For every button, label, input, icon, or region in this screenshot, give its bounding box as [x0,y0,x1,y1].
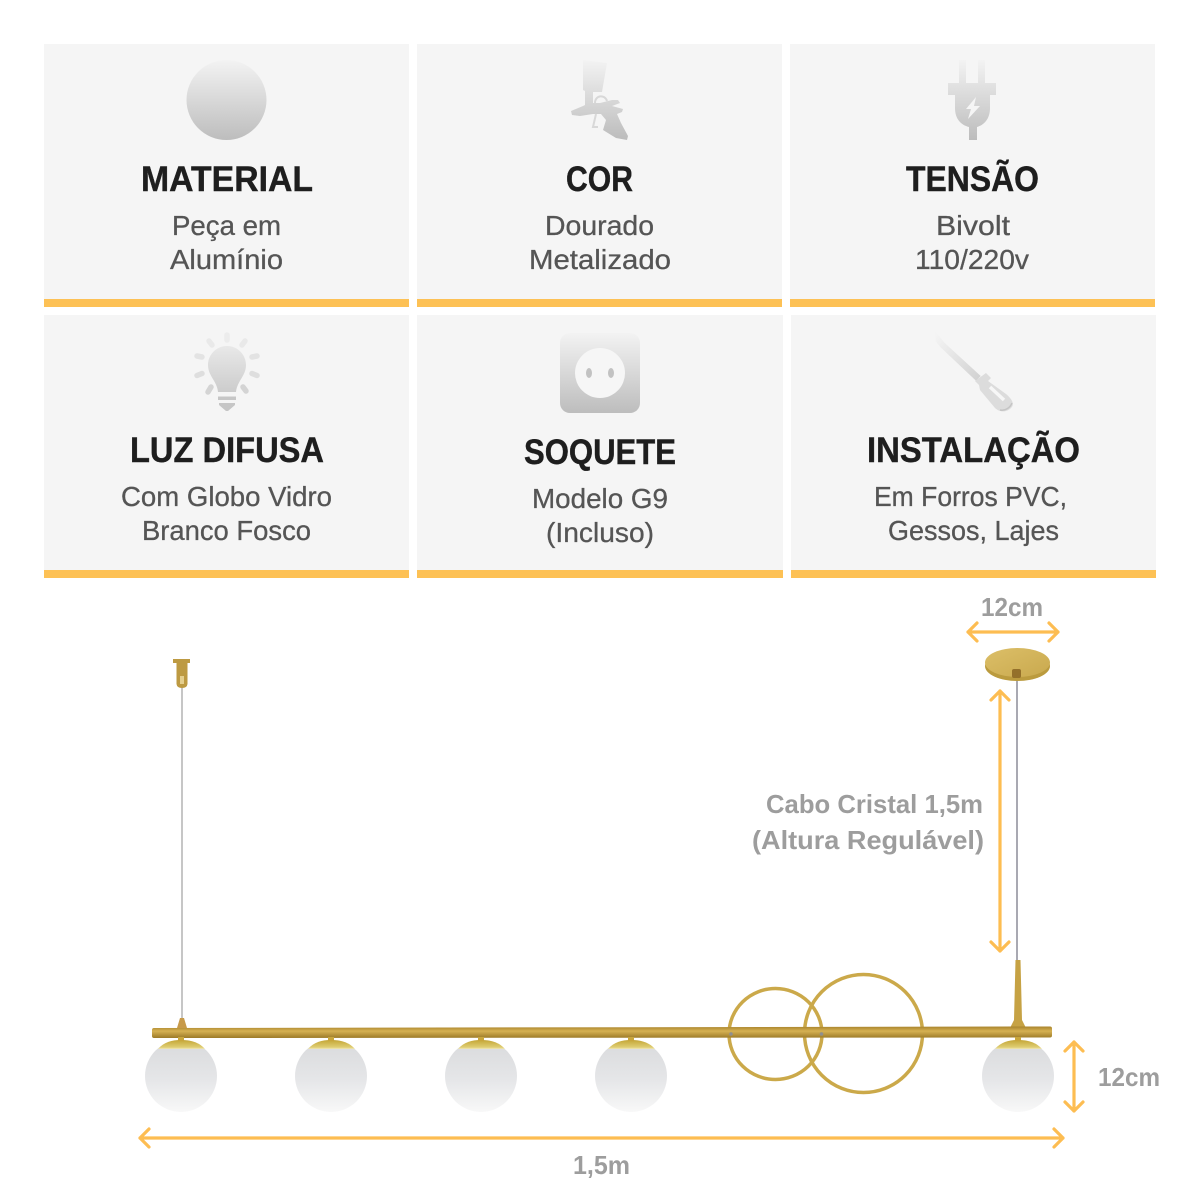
icon: socket [560,333,640,413]
panel: luz difusa [44,315,409,578]
icon: spray gun [571,60,628,140]
rings [729,974,922,1092]
text: modelo g9: (Incluso) [546,517,654,548]
label: crystal cable [752,789,984,855]
heading: tensão: TENSÃO [906,160,1039,199]
text: peça em alumínio: Alumínio [170,244,283,275]
text: com globo vidro: Com Globo Vidro [121,481,332,512]
horizontal rod [152,1026,1052,1038]
text: dourado metalizado: Dourado [545,210,654,241]
ring joints [729,1032,823,1036]
text: peça em alumínio: Peça em [172,210,281,241]
text: forros, gessos, lajes: Gessos, Lajes [888,515,1059,546]
panel: tensão [790,44,1155,307]
icon: light bulb [197,335,257,411]
heading: material: MATERIAL [141,160,313,199]
heading: instalação: INSTALAÇÃO [867,431,1080,470]
text: dourado metalizado [529,210,671,275]
heading: luz difusa: LUZ DIFUSA [130,431,324,470]
globes with gold caps [145,1018,1054,1112]
icon: plug [948,60,996,140]
text: com globo vidro [121,481,332,546]
text: modelo g9 [532,483,668,548]
arrow: canopy width [968,623,1058,641]
text: forros, gessos, lajes [874,481,1067,546]
panel: cor [417,44,782,307]
text: bivolt: Bivolt [936,210,1010,241]
label: crystal cable: Cabo Cristal 1,5m [766,789,983,819]
text: peça em alumínio [170,210,283,275]
text: modelo g9: Modelo G9 [532,483,668,514]
text: bivolt [915,210,1029,275]
icon: screwdriver [936,333,1013,411]
pendant lamp product drawing [145,648,1054,1112]
arrow: globe height [1065,1042,1083,1111]
label: globe height: 12cm [1098,1062,1160,1092]
text: bivolt: 110/220v [915,244,1029,275]
arrow: total width [140,1129,1063,1147]
heading: cor: COR [566,160,633,199]
label: total width: 1,5m [573,1150,630,1180]
panel: material [44,44,409,307]
label: canopy width: 12cm [981,592,1043,622]
left cable and ceiling anchor [173,659,190,1022]
ceiling canopy [985,648,1050,681]
text: com globo vidro: Branco Fosco [142,515,311,546]
panel: instalação [791,315,1156,578]
panel: soquete [417,315,783,578]
label: crystal cable: (Altura Regulável) [752,825,984,855]
right cable and tube [1010,680,1026,1028]
text: dourado metalizado: Metalizado [529,244,671,275]
heading: soquete: SOQUETE [524,433,676,472]
text: forros, gessos, lajes: Em Forros PVC, [874,481,1067,512]
icon: sphere [186,60,266,140]
arrow: cable height [991,691,1009,951]
